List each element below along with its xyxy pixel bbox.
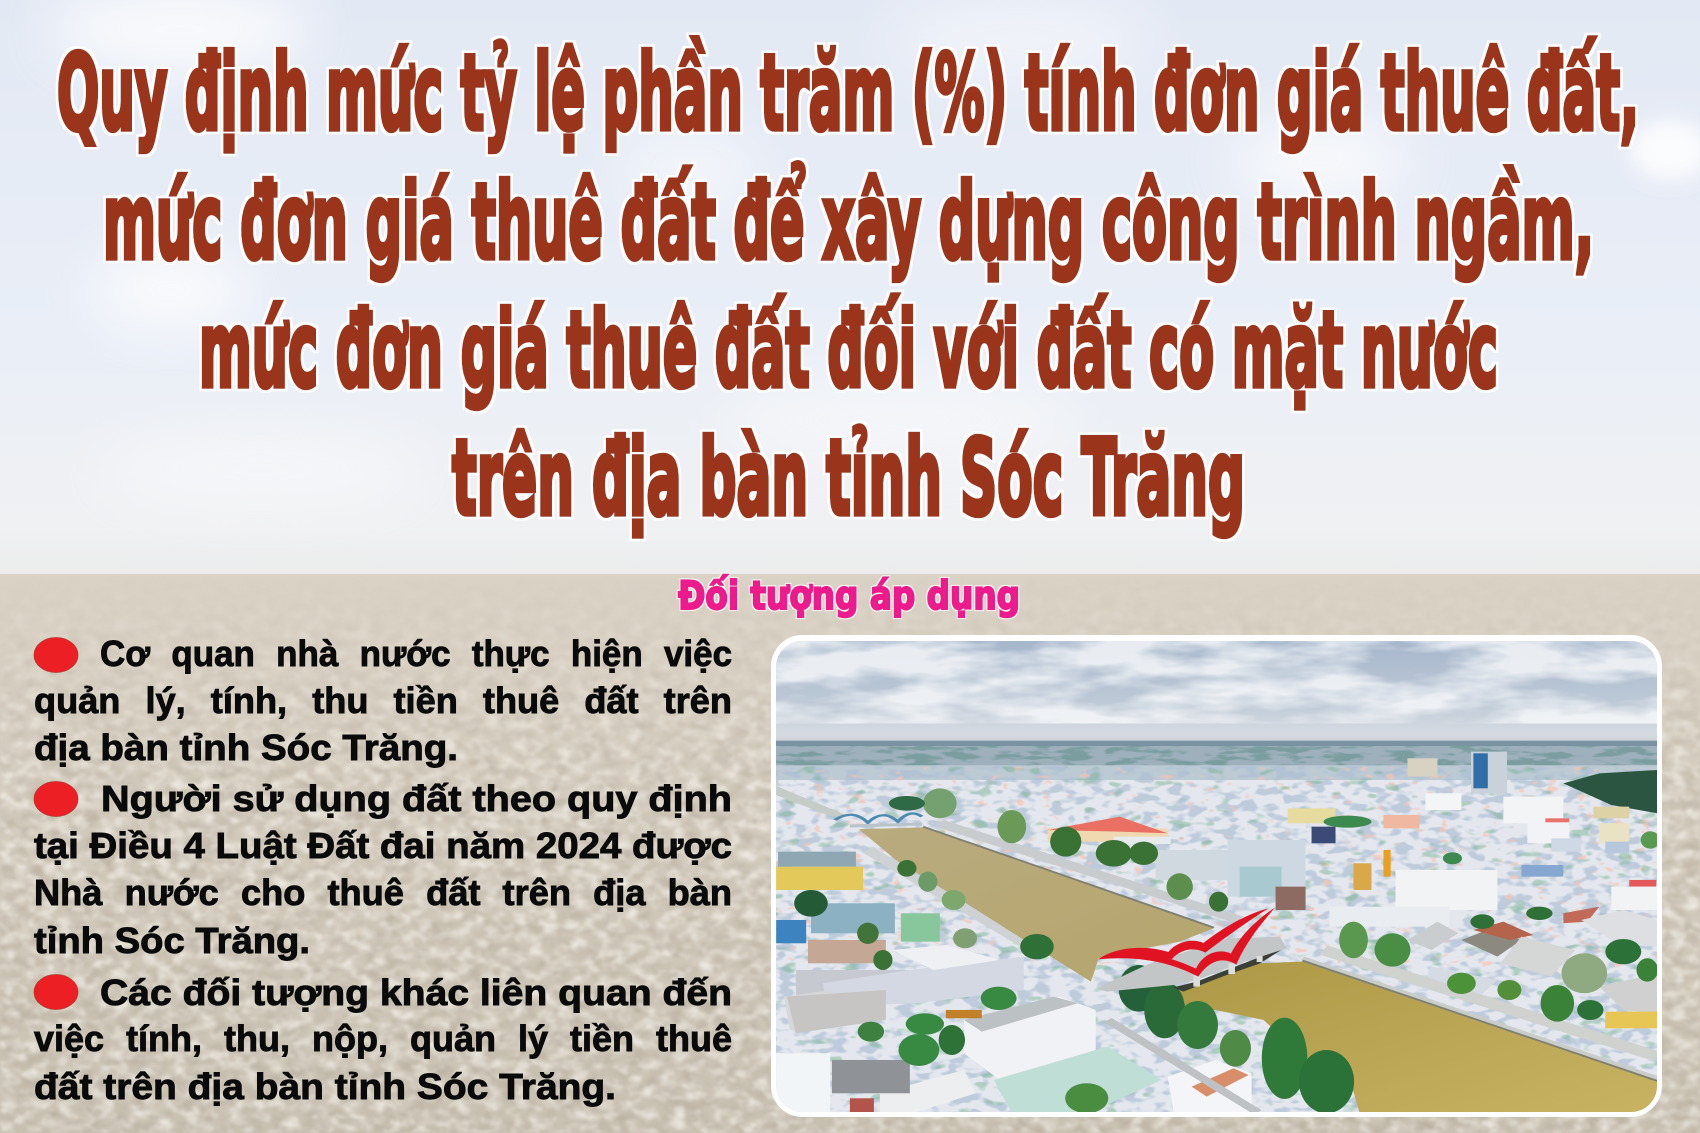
title (57, 32, 1639, 539)
photo red bridge (1097, 908, 1287, 992)
bullet item 1: quản lý, tính, thu tiền thuê đất trên (34, 680, 732, 721)
section heading: applicable subjects: Đối tượng áp dụng (678, 574, 1020, 619)
photo river upper (859, 827, 1214, 982)
bullet item 2: Nhà nước cho thuê đất trên địa bàn (34, 872, 732, 913)
bridge underside (1173, 947, 1287, 992)
bullet item 3: việc tính, thu, nộp, quản lý tiền thuê (34, 1018, 732, 1059)
bullet marker 3 (34, 974, 78, 1010)
bullet item 2: Người sử dụng đất theo quy định (101, 778, 732, 819)
bullet item 3: đất trên địa bàn tỉnh Sóc Trăng. (34, 1066, 616, 1107)
photo river far bend (776, 786, 850, 817)
photo rooftops (776, 793, 1657, 1112)
bullet marker 2 (34, 782, 78, 816)
bullet item 2: tại Điều 4 Luật Đất đai năm 2024 được (34, 825, 732, 866)
photo trees (794, 788, 1660, 1113)
photo scene (760, 633, 1683, 1117)
bullet item 2: tỉnh Sóc Trăng. (34, 920, 310, 961)
red arch upper (1098, 908, 1268, 959)
photo city base (760, 741, 1683, 1117)
photo tall building (1407, 752, 1563, 823)
photo embankment edge (923, 827, 1657, 1081)
bullet item 3 (34, 972, 732, 1107)
bullet item 1: Cơ quan nhà nước thực hiện việc (100, 633, 732, 674)
bullet item 2 (34, 778, 732, 961)
photo far blue bridge (835, 813, 922, 826)
background: cloudy sky (0, 0, 1700, 600)
bullet item 1: địa bàn tỉnh Sóc Trăng. (34, 727, 458, 768)
bridge piers (1193, 956, 1263, 987)
photo embankments (868, 823, 1657, 1112)
bullet item 3: Các đối tượng khác liên quan đến (100, 972, 732, 1013)
red arch lower (1098, 908, 1275, 977)
photo frame (774, 638, 1660, 1114)
bullet item 1 (34, 633, 732, 768)
photo river lower (1180, 962, 1657, 1112)
photo sky (776, 641, 1657, 740)
photo: aerial view of Sóc Trăng city and river (760, 633, 1683, 1117)
bridge deck (1097, 937, 1287, 992)
background: textured field (0, 574, 1700, 1133)
bullet marker 1 (34, 638, 78, 672)
